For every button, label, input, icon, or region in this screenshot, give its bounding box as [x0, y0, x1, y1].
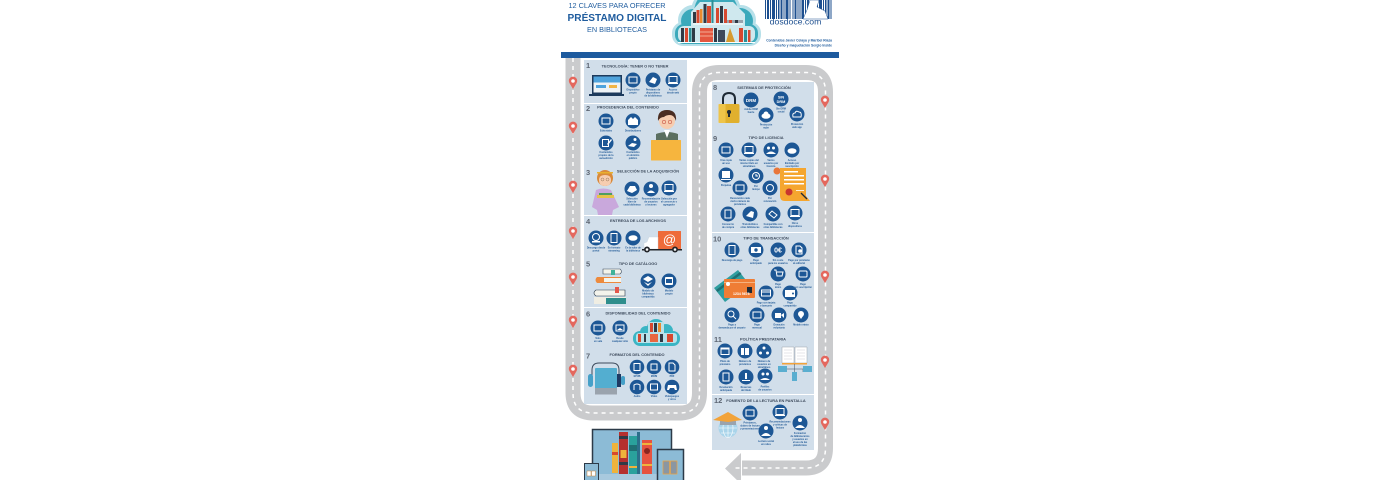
icon: remote: cualquier sitio	[612, 340, 629, 343]
panel: 3 acquisition selection	[584, 166, 687, 215]
icon: consortium: Consorcio	[722, 223, 734, 226]
icon: bundle: Selección	[626, 198, 638, 200]
icon: library device: dispositivos	[646, 92, 661, 94]
icon: no DRM: Sin DRM	[776, 108, 786, 110]
panel: 2 content origin: 2	[586, 104, 590, 113]
icon: credit card: o bancario	[760, 304, 773, 308]
icon: transferable: otras bibliotecas	[740, 226, 760, 229]
icon: cloud access: suscripción	[785, 165, 799, 168]
panel: 8 protection systems: SISTEMAS DE PROTECCIÓN	[737, 85, 791, 90]
icon: calendar: préstamo	[720, 363, 731, 366]
icon: metered: cierto número de	[730, 200, 750, 203]
icon: DRM: DRM	[746, 98, 756, 103]
panel: 8 protection systems: 8	[713, 83, 717, 92]
icon: mail: mensual	[752, 326, 762, 330]
illustration: person with box	[651, 110, 681, 160]
illustration: certificate	[774, 168, 810, 201]
icon: device: Dispositivo	[627, 88, 640, 92]
icon: device limit: Otros	[792, 222, 799, 225]
icon: search: Pago a	[728, 324, 737, 326]
icon: aggregated catalogue: compartida	[642, 296, 655, 298]
header title: 12 CLAVES PARA OFRECER	[568, 1, 666, 10]
icon: time licence: Por	[754, 185, 758, 188]
panel: 11 lending policy: POLÍTICA PRESTATARIA	[740, 336, 786, 342]
icon: renew: Por	[768, 197, 772, 200]
icon: search: demanda por el usuario	[719, 326, 746, 330]
panel: 3 acquisition selection: 3	[586, 168, 590, 177]
header title: PRÉSTAMO DIGITAL	[568, 11, 666, 24]
panel: 5 catalogue type: TIPO DE CATÁLOGO	[619, 261, 657, 266]
icon: self publishing: autoedición	[599, 157, 613, 160]
icon: cart: único	[775, 286, 782, 289]
icon: cloud streaming: web app	[792, 126, 802, 129]
icon: users group: Número de	[758, 360, 771, 363]
icon: clipboard	[718, 370, 734, 392]
illustration: audiobook with headphones	[588, 363, 625, 394]
icon: multiple users	[764, 142, 778, 168]
icon: bundle: libre de	[628, 200, 637, 204]
icon: bundle	[623, 182, 641, 206]
icon: free content: en dominio	[627, 154, 640, 157]
icon: tablet training: lectura	[776, 426, 785, 430]
panel: 7 content formats: FORMATOS DEL CONTENIDO	[609, 352, 665, 357]
illustration: credit cards: 1234 5678	[733, 292, 750, 296]
illustration: cloud of books small	[633, 319, 680, 346]
icon: game	[665, 380, 680, 401]
icon: consortium	[720, 206, 736, 229]
icon: multi copy	[739, 142, 759, 168]
icon: device	[626, 72, 640, 94]
icon: aggregated catalogue	[640, 274, 656, 298]
icon: multi copy: Varias copias del	[739, 159, 759, 162]
icon: on site: Solo	[595, 337, 601, 340]
icon: remote: Desde	[616, 337, 624, 340]
icon: shared: Compartible con	[764, 223, 783, 226]
icon: wallet: compartido	[783, 304, 797, 308]
icon: free content: público	[629, 157, 638, 160]
icon: one copy: Una copia	[720, 159, 732, 162]
icon: self publishing: propios de la	[599, 154, 614, 157]
icon: screen: Pago	[800, 283, 806, 286]
icon: multiple users: Varios	[767, 159, 775, 162]
icon: tablet training	[769, 404, 791, 430]
icon: clipboard: anticipada	[720, 389, 733, 392]
icon: multi copy: simultáneo	[743, 165, 756, 168]
icon: credit card: Pago con tarjeta	[757, 302, 776, 304]
icon: screen reading: Préstamos,	[744, 422, 757, 424]
icon: free content: Contenidos	[626, 151, 640, 154]
icon: zero cost: 0€	[774, 248, 782, 254]
icon: distributors: Distribuidores	[625, 130, 642, 132]
icon: clipboard: Devolución	[720, 386, 733, 389]
icon: cloud reading: Protección	[760, 124, 773, 126]
icon: metered: préstamos	[734, 203, 747, 206]
icon: gift: Modelo mixto	[793, 324, 809, 326]
illustration: devices with books	[584, 430, 684, 480]
icon: mobile	[606, 230, 622, 252]
icon: book limit: Número de	[739, 360, 752, 363]
icon: book limit	[738, 344, 752, 366]
icon: epub: EPUB	[634, 375, 641, 378]
icon: renew	[762, 180, 778, 203]
icon: video call	[772, 308, 786, 330]
icon: librarian	[790, 416, 810, 447]
icon: user selection: Recomendación	[642, 198, 661, 200]
icon: one copy	[718, 142, 734, 165]
icon: user selection	[642, 182, 661, 206]
icon: DRM: Adobe DRM	[744, 108, 758, 111]
icon: shared	[764, 206, 783, 229]
icon: wallet: Pago	[787, 302, 793, 304]
icon: pay per use: al editorial	[793, 262, 805, 265]
icon: purchase: anticipado	[750, 262, 763, 265]
icon: pay per use	[788, 242, 810, 265]
panel: 10 transaction types: TIPO DE TRANSACCIÓN	[743, 236, 789, 240]
icon: pdf: PDF	[670, 375, 675, 378]
icon: cloud access: Acceso	[788, 159, 797, 162]
icon: no DRM: SIN	[778, 96, 784, 100]
icon: zero cost	[768, 242, 789, 265]
icon: pay per use: Pago por préstamo	[788, 259, 810, 262]
panel: 9 licence types: 9	[713, 134, 717, 143]
panel: 6 content availability	[584, 308, 687, 349]
icon: library device: de la biblioteca	[644, 94, 662, 98]
icon: aggregated catalogue: Modelo de	[642, 290, 655, 292]
panel: 1 technology	[584, 60, 687, 103]
icon: librarian: Formación	[794, 432, 807, 435]
road	[573, 58, 826, 480]
icon: calendar	[718, 344, 732, 366]
map pins along the road	[569, 77, 829, 430]
icon: mobile: En formato	[608, 246, 621, 250]
icon: multi copy: mismo título en	[740, 162, 758, 165]
icon: metered	[730, 180, 750, 206]
illustration: padlock	[718, 93, 740, 123]
illustration: delivery truck: @	[663, 232, 676, 247]
icon: transferable: Transferible a	[742, 223, 758, 226]
illustration: woman with books	[592, 170, 619, 215]
icon: screen reading	[740, 406, 760, 430]
icon: search	[719, 308, 746, 330]
panel: 10 transaction types	[712, 233, 814, 333]
icon: device: propio	[629, 92, 637, 94]
icon: cloud streaming	[790, 106, 804, 129]
icon: cart: Pago	[775, 283, 781, 286]
icon: mail: Pago	[754, 324, 760, 326]
logo: dosdoce.com barcode	[765, 0, 832, 26]
icon: tablet training: Recomendaciones	[769, 420, 791, 424]
icon: device limit: dispositivos	[788, 225, 803, 228]
icon: user selection: de usuarios	[644, 200, 658, 204]
icon: laptop access	[666, 72, 680, 94]
icon: DRM	[744, 92, 758, 114]
icon: mobi: MOBI	[651, 375, 657, 378]
icon: users group	[756, 344, 772, 369]
icon: users group: usuarios en	[757, 363, 771, 366]
panel: 11 lending policy	[712, 333, 814, 394]
illustration: stacked books	[594, 269, 626, 304]
icon: multiple users: usuarios por	[764, 162, 778, 165]
header title	[568, 1, 666, 34]
panel: 5 catalogue type: 5	[586, 260, 590, 268]
icon: on site	[590, 320, 606, 343]
icon: cart	[770, 266, 786, 289]
icon: reader profile	[758, 368, 772, 392]
icon: self publishing	[598, 136, 614, 160]
icon: user selection: y lectores	[645, 204, 657, 206]
icon: reservations: del título	[741, 389, 752, 392]
icon: game: y otros	[668, 398, 677, 401]
panel: 4 file delivery	[584, 216, 687, 258]
icon: device limit	[788, 206, 803, 228]
logo: dosdoce.com barcode: dosdoce.com	[770, 16, 821, 26]
icon: monitor licence: Perpetua	[721, 184, 732, 187]
panel: 7 content formats	[584, 349, 687, 404]
icon: mobile: streaming	[608, 250, 620, 252]
panel: 12 on-screen reading promotion: FOMENTO DE LA LECTURA EN PANTALLA	[726, 398, 806, 403]
icon: video: Vídeo	[651, 395, 658, 398]
icon: reservations	[738, 370, 754, 392]
icon: reader	[758, 424, 774, 446]
panel: 1 technology: 1	[586, 61, 590, 70]
icon: renew: renovación	[764, 200, 777, 203]
icon: library device	[644, 72, 662, 98]
icon: audio: Audio	[634, 395, 641, 398]
panel: 11 lending policy: 11	[714, 335, 722, 344]
credits: Contenidos Javier Celaya y Maribel Riaza	[766, 38, 832, 42]
panel: 4 file delivery: ENTREGA DE LOS ARCHIVOS	[610, 218, 666, 223]
icon: cloud: la biblioteca	[626, 250, 641, 252]
icon: no DRM: social	[778, 110, 785, 114]
panel: 9 licence types	[712, 132, 814, 232]
panel: 12 on-screen reading promotion: 12	[714, 396, 722, 405]
panel: 2 content origin: PROCEDENCIA DEL CONTENIDO	[597, 104, 659, 110]
icon: screen	[794, 266, 813, 289]
icon: cloud reading: nube	[763, 126, 770, 130]
icon: video call: voluntaria	[773, 326, 785, 330]
icon: credit card	[757, 286, 776, 308]
icon: no DRM	[774, 92, 788, 114]
icon: bundle: cada biblioteca	[623, 204, 641, 206]
panel: 6 content availability: 6	[586, 310, 590, 318]
icon: own catalogue	[662, 274, 676, 296]
header illustration: cloud of books	[672, 0, 761, 46]
icon: multiple users: licencia	[767, 165, 776, 168]
icon: cloud access: ilimitado por	[785, 162, 799, 165]
panel: 6 content availability: DISPONIBILIDAD DEL CONTENIDO	[606, 310, 670, 316]
icon: DRM: fuerte	[748, 111, 755, 114]
header divider bar	[561, 52, 839, 58]
icon: video call: Donación	[774, 324, 785, 326]
icon: librarian: y usuarios en	[792, 438, 808, 441]
panel: 2 content origin	[584, 104, 687, 166]
panel: 3 acquisition selection: SELECCIÓN DE LA ADQUISICIÓN	[617, 168, 679, 174]
icon: own catalogue: Modelo	[665, 290, 674, 292]
icon: librarian: el uso de las	[793, 441, 808, 444]
icon: aggregator: Selección por	[661, 198, 677, 200]
icon: reader profile: de usuarios	[758, 388, 772, 392]
icon: screen reading: clubes de lectura	[740, 424, 760, 428]
icon: cloud streaming: Protección	[791, 123, 804, 126]
icon: remote	[612, 320, 629, 343]
icon: zero cost: para los usuarios	[768, 262, 789, 265]
icon: loan: Descarga de pago	[722, 259, 743, 262]
icon: shared: otras bibliotecas	[764, 226, 783, 229]
icon: one copy: un uso	[722, 162, 730, 165]
icon: free content	[626, 136, 640, 160]
icon: librarian: de bibliotecarios	[790, 435, 810, 438]
icon: users group: simultáneo	[758, 366, 771, 369]
icon: aggregated catalogue: biblioteca	[642, 292, 654, 296]
icon: purchase: Pago	[753, 259, 759, 262]
icon: cloud reading	[758, 108, 774, 130]
panel: 12 on-screen reading promotion	[712, 395, 814, 450]
icon: game: Videojuegos	[665, 395, 680, 398]
panel: 7 content formats: 7	[586, 352, 590, 360]
icon: metered: Renovación cada	[730, 197, 750, 200]
panel: 4 file delivery: 4	[586, 217, 591, 226]
icon: laptop access: desde web	[667, 92, 680, 94]
panel: 5 catalogue type	[584, 258, 687, 307]
icon: mail	[750, 308, 764, 330]
illustration: graduation cap and globe	[713, 412, 742, 438]
icon: transferable	[740, 206, 760, 229]
icon: reader: en redes	[761, 443, 772, 446]
icon: aggregator: agregador	[663, 204, 675, 206]
icon: reservations: Reservas	[741, 386, 752, 389]
illustration: laptop	[589, 75, 624, 96]
icon: cloud: En la nube de	[625, 246, 641, 250]
credits: Diseño y maquetación Sergio Inside	[775, 44, 832, 48]
header title: EN BIBLIOTECAS	[587, 25, 647, 34]
icon: cloud access	[784, 142, 800, 168]
icon: laptop access: Acceso	[669, 88, 678, 92]
icon: reader: Lectura social	[758, 440, 774, 443]
icon: library device: Préstamo de	[646, 88, 661, 92]
panel: 8 protection systems	[712, 82, 814, 132]
icon: self publishing: Contenidos	[599, 151, 613, 154]
icon: screen: por suscripción	[794, 286, 813, 289]
icon: time licence: tiempo	[752, 188, 760, 191]
icon: download	[587, 230, 606, 252]
illustration: open book with devices	[778, 347, 812, 381]
icon: calendar: Plazo de	[720, 360, 731, 363]
icon: tablet training: y críticas de	[773, 424, 788, 426]
icon: aggregator: el consorcio o	[661, 200, 678, 204]
icon: reader profile: Perfiles	[761, 386, 770, 388]
icon: librarian: plataformas	[793, 444, 807, 447]
icon: wallet	[782, 286, 798, 308]
icon: cloud	[625, 230, 641, 252]
icon: download: portal	[593, 250, 600, 252]
icon: screen reading: y presentaciones	[740, 428, 760, 430]
panel: 1 technology: TECNOLOGÍA: TENER O NO TENER	[602, 64, 669, 68]
panel: 10 transaction types: 10	[713, 234, 721, 244]
icon: zero cost: Sin coste	[773, 259, 784, 262]
icon: time licence	[748, 168, 764, 191]
icon: consortium: de compra	[722, 226, 735, 229]
icon: own catalogue: propio	[665, 292, 673, 296]
credits	[766, 38, 832, 48]
icon: book limit: préstamos	[739, 363, 752, 366]
icon: publishers: Editoriales	[600, 130, 613, 132]
icon: on site: en sala	[594, 340, 603, 343]
icon: purchase	[748, 242, 764, 265]
icon: aggregator	[661, 180, 678, 206]
icon: download: Descarga desde	[587, 246, 606, 250]
panel: 9 licence types: TIPO DE LICENCIA	[748, 135, 784, 140]
icon: no DRM: DRM	[777, 100, 785, 104]
